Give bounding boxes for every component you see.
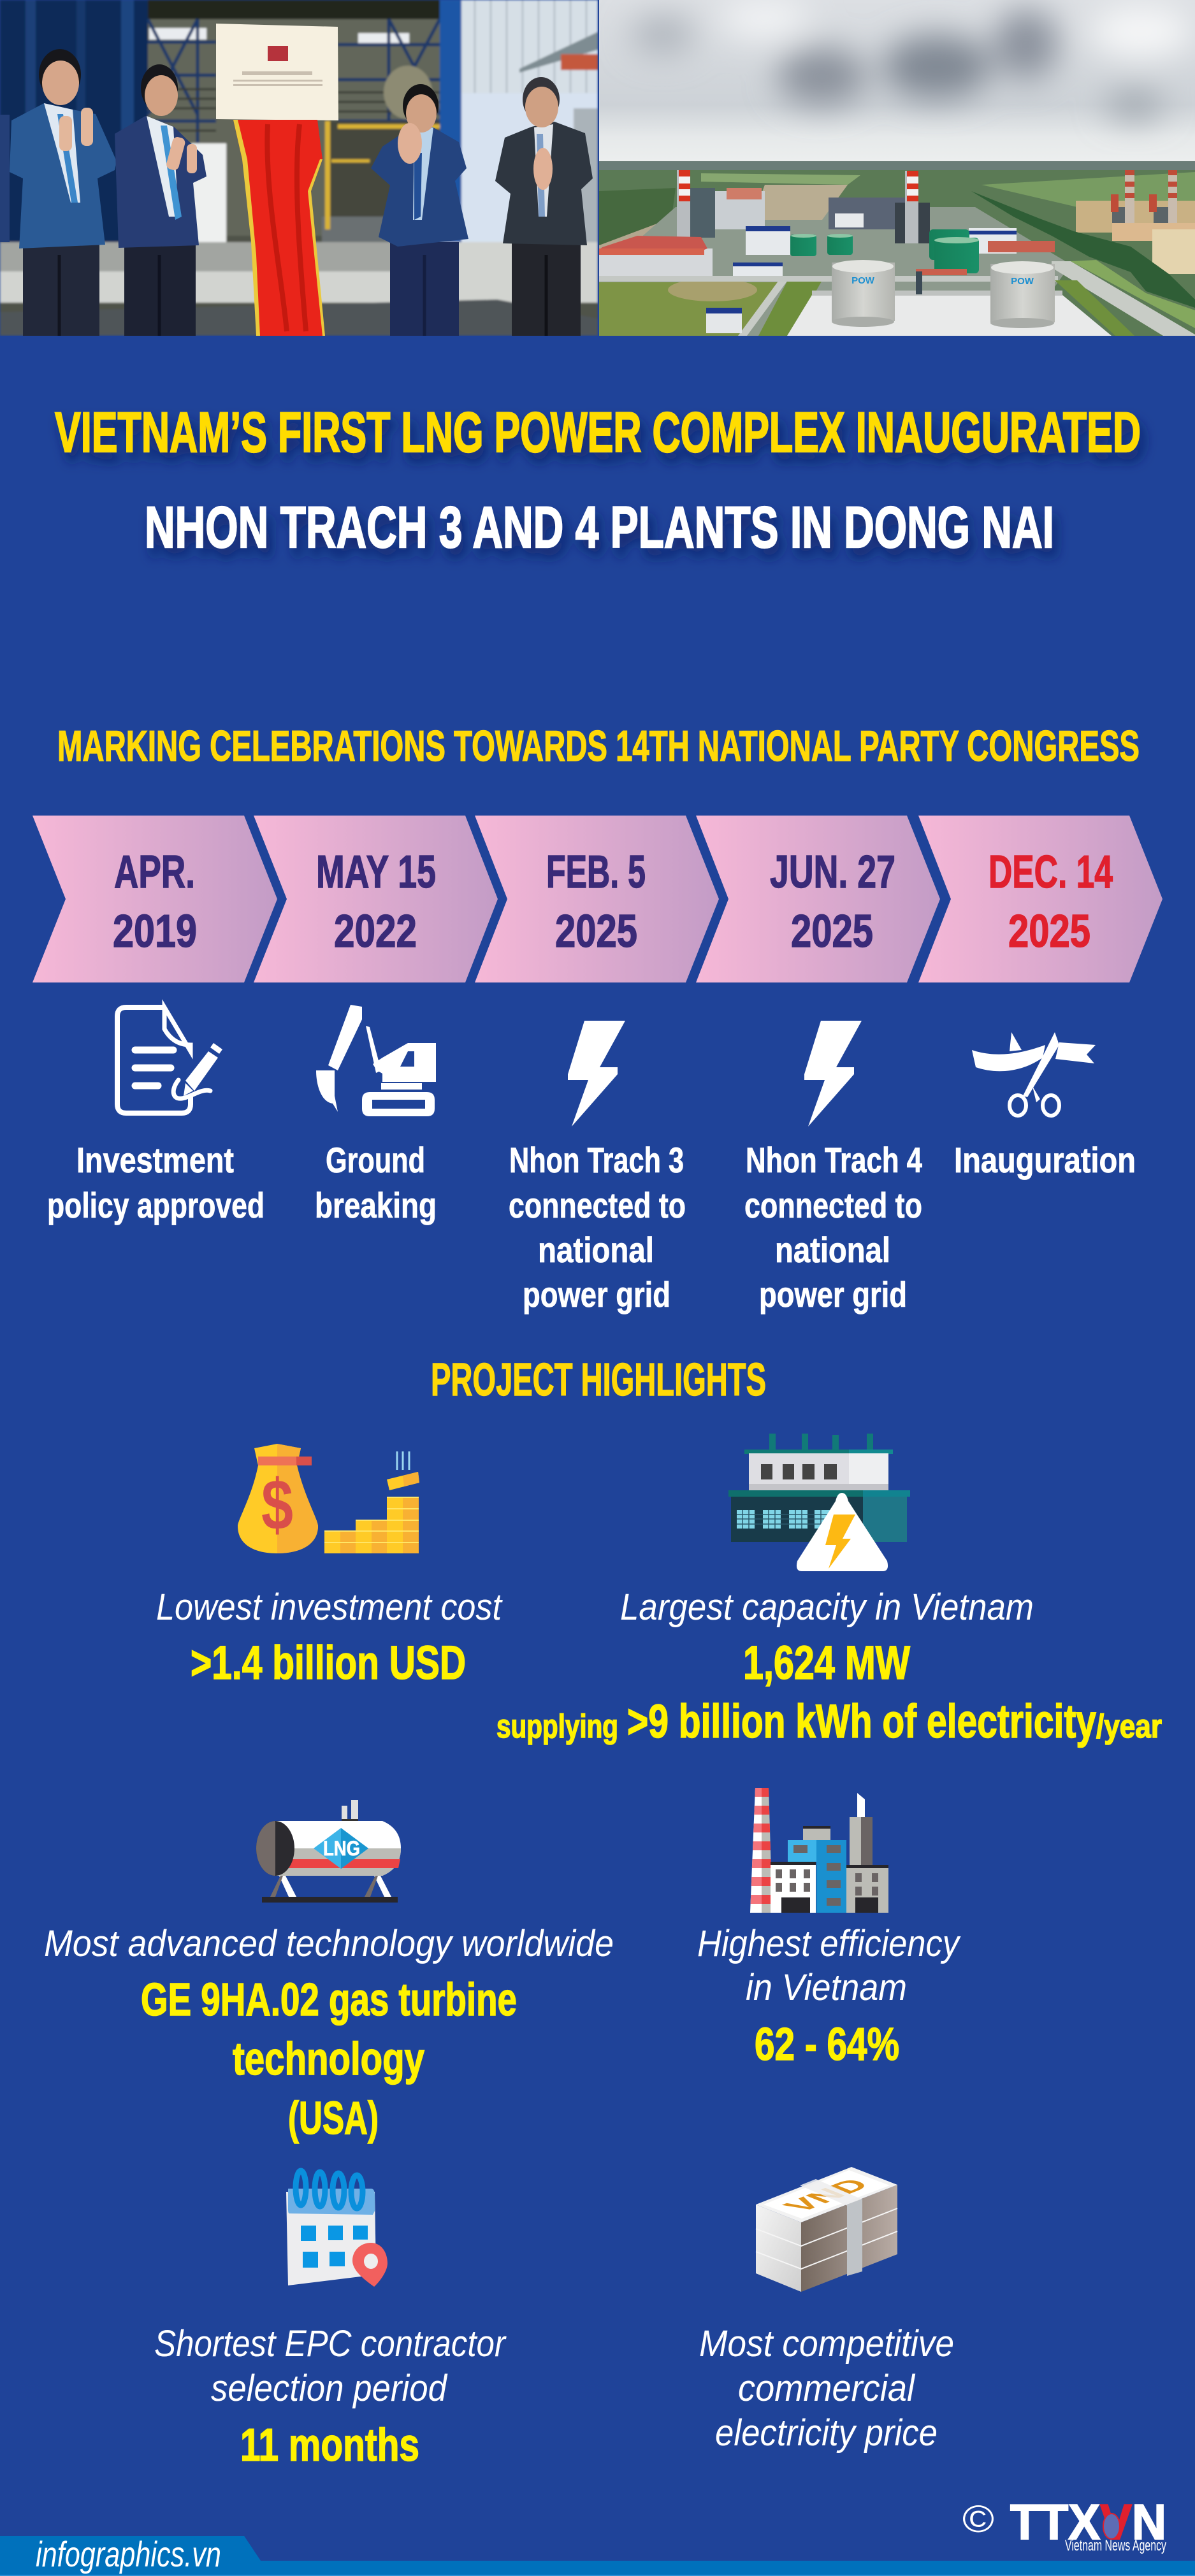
chevron: May 15 2022: MAY 15 <box>316 847 436 898</box>
icon: LNG tank <box>256 1800 401 1903</box>
highlight: electricity price <box>699 2323 954 2454</box>
icon: money bag and coins: $ <box>261 1465 293 1544</box>
red roof hall <box>599 236 713 277</box>
LNG tank 2 <box>990 261 1055 328</box>
highlight: capacity <box>496 1587 1162 1748</box>
stack 1 <box>677 170 715 238</box>
highlight: technology <box>44 1923 614 2144</box>
highlight: efficiency: in Vietnam <box>746 1967 907 2008</box>
timeline chevrons <box>33 816 1162 982</box>
highlight: investment cost <box>156 1587 503 1689</box>
highlight: capacity: supplying <box>496 1708 618 1745</box>
icon: calendar with pin <box>286 2171 387 2287</box>
person 4 <box>495 77 593 336</box>
chevron: Feb 5 2025: 2025 <box>555 906 637 957</box>
chevron: Apr 2019: APR. <box>114 847 195 898</box>
grass and road foreground <box>599 282 779 336</box>
highlight: electricity price: commercial <box>738 2368 916 2409</box>
right plants <box>1076 170 1195 274</box>
highlight: capacity: /year <box>1096 1708 1162 1745</box>
right grass and road <box>1052 261 1195 336</box>
chevron: May 15 2022 <box>254 816 498 982</box>
chevron: Jun 27 2025: JUN. 27 <box>770 847 895 898</box>
label: Nhon Trach 3: power grid <box>523 1274 670 1314</box>
logo: TTXVN: © <box>962 2498 994 2540</box>
person 1 <box>10 49 117 336</box>
stack 2 <box>895 171 930 243</box>
chevron: Feb 5 2025: FEB. 5 <box>546 847 646 898</box>
logo: TTXVN: TTXVN <box>1010 2494 1166 2550</box>
highlight: capacity: 1,624 MW <box>743 1636 910 1689</box>
icon: VND money stack: VND <box>776 2175 878 2215</box>
label: Nhon Trach 3 <box>509 1140 686 1314</box>
LNG tank 1: POW <box>851 275 875 286</box>
chevron: Dec 14 2025: 2025 <box>1008 906 1090 957</box>
plant yard <box>599 207 1071 336</box>
highlight: EPC selection: selection period <box>211 2368 448 2409</box>
highlight: technology: (USA) <box>288 2093 379 2144</box>
highlight: efficiency: Highest efficiency <box>697 1923 961 1964</box>
photo: inauguration ceremony <box>0 0 598 336</box>
icon: VND money stack <box>756 2167 897 2292</box>
highlight: efficiency <box>697 1923 961 2070</box>
chevron: May 15 2022: 2022 <box>334 906 417 957</box>
icon: document with pen <box>117 1007 222 1113</box>
icon: lightning bolt <box>804 1021 862 1126</box>
chevron: Jun 27 2025: 2025 <box>791 906 873 957</box>
chevron: Jun 27 2025 <box>696 816 940 982</box>
label: investment policy: Investment <box>76 1140 234 1180</box>
highlight: investment cost: Lowest investment cost <box>156 1587 503 1628</box>
label: Nhon Trach 3: national <box>538 1230 654 1270</box>
highlight: electricity price: electricity price <box>715 2412 938 2454</box>
label: investment policy: policy approved <box>47 1185 264 1225</box>
label: inauguration: Inauguration <box>954 1140 1136 1180</box>
highlight: technology: GE 9HA.02 gas turbine <box>141 1975 517 2026</box>
highlight: investment cost: >1.4 billion USD <box>191 1636 466 1689</box>
highlight: EPC selection <box>154 2323 507 2471</box>
icon: ribbon and scissors <box>972 1032 1096 1116</box>
highlight: efficiency: 62 - 64% <box>755 2019 899 2070</box>
label: Nhon Trach 4: power grid <box>759 1274 907 1314</box>
footer site name: infographics.vn <box>36 2534 221 2574</box>
highlight: EPC selection: Shortest EPC contractor <box>154 2323 507 2364</box>
icon: factory <box>746 1784 888 1918</box>
person 2 <box>115 64 206 336</box>
LNG platform <box>787 280 1134 336</box>
heading: project highlights: PROJECT HIGHLIGHTS <box>431 1355 766 1406</box>
red cloth <box>233 120 325 336</box>
label: Nhon Trach 3: connected to <box>509 1185 686 1225</box>
green tanks <box>790 229 979 273</box>
highlight: capacity: Largest capacity in Vietnam <box>620 1587 1034 1628</box>
highlight: technology: Most advanced technology worldwide <box>44 1923 614 1964</box>
highlight: electricity price: Most competitive <box>699 2323 954 2364</box>
LNG tank 1 <box>832 260 895 327</box>
plaque <box>216 24 338 120</box>
chevron: Dec 14 2025 <box>918 816 1162 982</box>
label: Nhon Trach 4: Nhon Trach 4 <box>746 1140 922 1180</box>
chevron: Feb 5 2025 <box>475 816 719 982</box>
icon: lightning bolt <box>568 1021 625 1126</box>
label: Nhon Trach 4 <box>744 1140 922 1314</box>
chevron: Apr 2019 <box>33 816 277 982</box>
icon: money bag and coins <box>238 1444 419 1553</box>
label: Nhon Trach 4: national <box>775 1230 890 1270</box>
label: investment policy <box>47 1140 264 1225</box>
highlight: EPC selection: 11 months <box>240 2420 419 2471</box>
icon: power plant building <box>728 1434 910 1571</box>
person 3 <box>371 84 468 336</box>
label: Nhon Trach 4: connected to <box>744 1185 922 1225</box>
title <box>55 400 1141 560</box>
timeline labels <box>47 1140 1136 1314</box>
highlight: technology: technology <box>233 2034 424 2085</box>
label: ground breaking <box>315 1140 437 1225</box>
tree line <box>971 191 1195 308</box>
icon: LNG tank: LNG <box>323 1837 360 1860</box>
chevron: Apr 2019: 2019 <box>113 906 197 957</box>
LNG tank 2: POW <box>1011 276 1034 287</box>
icon: excavator <box>316 1005 436 1116</box>
label: ground breaking: Ground <box>326 1140 425 1180</box>
footer band <box>0 2534 1195 2576</box>
chevron: Dec 14 2025: DEC. 14 <box>989 847 1113 898</box>
photo: power complex aerial view <box>599 0 1195 336</box>
label: Nhon Trach 3: Nhon Trach 3 <box>509 1140 684 1180</box>
label: ground breaking: breaking <box>315 1185 437 1225</box>
